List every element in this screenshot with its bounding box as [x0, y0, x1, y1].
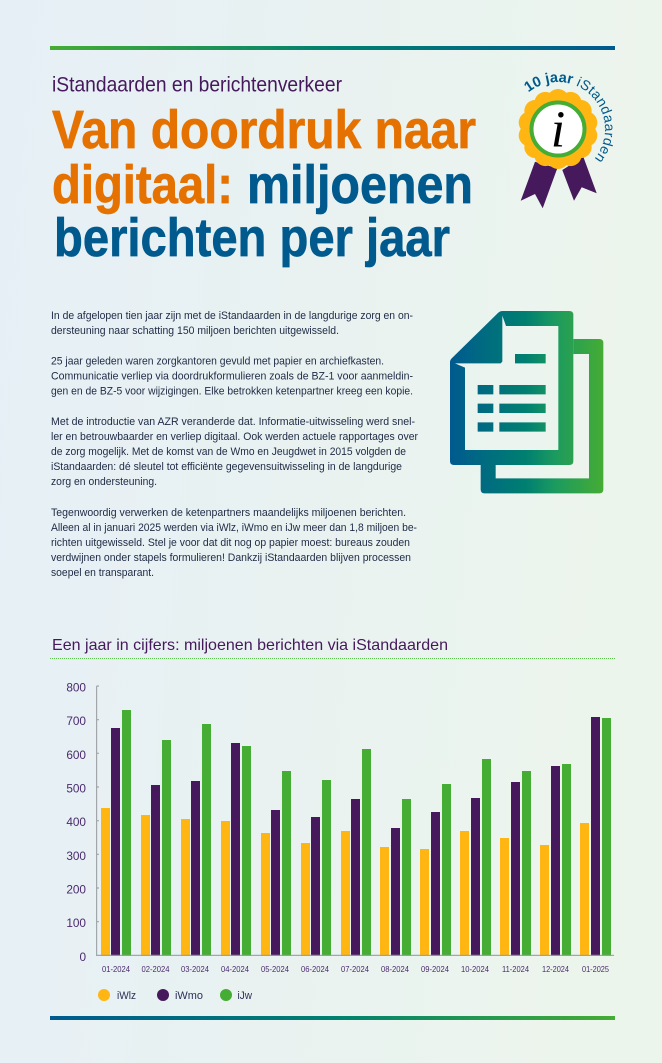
x axis labels: 04-2024	[221, 965, 250, 974]
iWlz bars	[101, 808, 589, 956]
y axis labels: 700	[66, 714, 86, 728]
title: miljoenen	[247, 155, 473, 215]
x axis labels: 01-2025	[582, 965, 610, 974]
x axis labels: 11-2024	[502, 965, 530, 974]
x axis labels: 12-2024	[542, 965, 570, 974]
ribbon tails	[521, 157, 597, 208]
x axis labels: 05-2024	[261, 965, 290, 974]
legend: iWlz	[117, 990, 136, 1002]
subtitle: iStandaarden en berichtenverkeer	[52, 74, 342, 97]
intro text: dersteuning naar schatting 150 miljoen berichten uitgewisseld.	[51, 325, 339, 337]
bottom gradient bar	[50, 1016, 615, 1020]
intro text: Tegenwoordig verwerken de ketenpartners maandelijks miljoenen berichten.	[51, 507, 406, 519]
y axis labels: 400	[66, 815, 86, 829]
letter i: i	[551, 102, 565, 158]
y axis labels: 200	[66, 882, 86, 896]
title: berichten per jaar	[54, 208, 450, 268]
x axis labels: 02-2024	[142, 965, 170, 974]
x axis labels: 10-2024	[461, 965, 490, 974]
x axis labels: 08-2024	[381, 965, 410, 974]
x axis labels: 06-2024	[301, 965, 330, 974]
x axis labels: 07-2024	[341, 965, 370, 974]
intro text: Alleen al in januari 2025 werden via iWlz, iWmo en iJw meer dan 1,8 miljoen be-	[51, 522, 417, 534]
intro text: de zorg mogelijk. Met de komst van de Wmo en Jeugdwet in 2015 volgden de	[51, 446, 406, 458]
x axis labels: 03-2024	[181, 965, 210, 974]
x axis labels	[102, 965, 610, 974]
axes	[97, 686, 614, 955]
intro text: zorg en ondersteuning.	[51, 476, 157, 488]
badge: 10 jaar iStandaarden	[518, 72, 613, 208]
intro text: gen en de BZ-5 voor wijzigingen. Elke betrokken ketenpartner kreeg een kopie.	[51, 386, 413, 398]
icon: documents	[450, 311, 603, 493]
iWmo bars	[111, 717, 600, 956]
y axis labels: 300	[66, 849, 86, 863]
legend	[98, 989, 252, 1002]
intro text: ler en betrouwbaarder en verliep digitaal. Ook werden actuele rapportages over	[51, 431, 418, 443]
intro text: In de afgelopen tien jaar zijn met de iStandaarden in de langdurige zorg en on-	[51, 310, 413, 322]
legend: iJw	[238, 990, 252, 1002]
legend: iWmo	[175, 990, 203, 1002]
y axis labels: 500	[66, 782, 86, 796]
intro text: Communicatie verliep via doordrukformulieren zoals de BZ-1 voor aanmeldin-	[51, 370, 413, 382]
bar chart	[66, 680, 614, 974]
y axis labels: 0	[79, 950, 86, 964]
title	[52, 100, 476, 268]
x axis labels: 09-2024	[421, 965, 450, 974]
scalloped rosette	[519, 89, 597, 169]
iJw bars	[122, 710, 611, 956]
top gradient bar	[50, 46, 615, 50]
y axis labels: 100	[66, 916, 86, 930]
intro text: Met de introductie van AZR veranderde dat. Informatie-uitwisseling werd snel-	[51, 416, 415, 428]
intro text	[51, 310, 418, 579]
x axis labels: 01-2024	[102, 965, 131, 974]
chart heading: Een jaar in cijfers: miljoenen berichten via iStandaarden	[52, 637, 448, 654]
intro text: richten uitgewisseld. Stel je voor dat dit nog op papier moest: bureaus zouden	[51, 537, 410, 549]
y axis labels: 800	[66, 680, 86, 694]
title: Van doordruk naar	[52, 100, 476, 160]
intro text: soepel en transparant.	[51, 567, 154, 579]
title: digitaal:	[52, 155, 233, 215]
ring	[532, 102, 584, 156]
intro text: verdwijnen onder stapels formulieren! Dankzij iStandaarden blijven processen	[51, 552, 411, 564]
arc text: 10 jaar iStandaarden	[524, 72, 613, 162]
intro text: 25 jaar geleden waren zorgkantoren gevuld met papier en archiefkasten.	[51, 355, 384, 367]
y axis labels: 600	[66, 748, 86, 762]
intro text: iStandaarden: dé sleutel tot efficiënte gegevensuitwisseling in de langdurige	[51, 461, 402, 473]
y axis labels	[66, 680, 86, 964]
